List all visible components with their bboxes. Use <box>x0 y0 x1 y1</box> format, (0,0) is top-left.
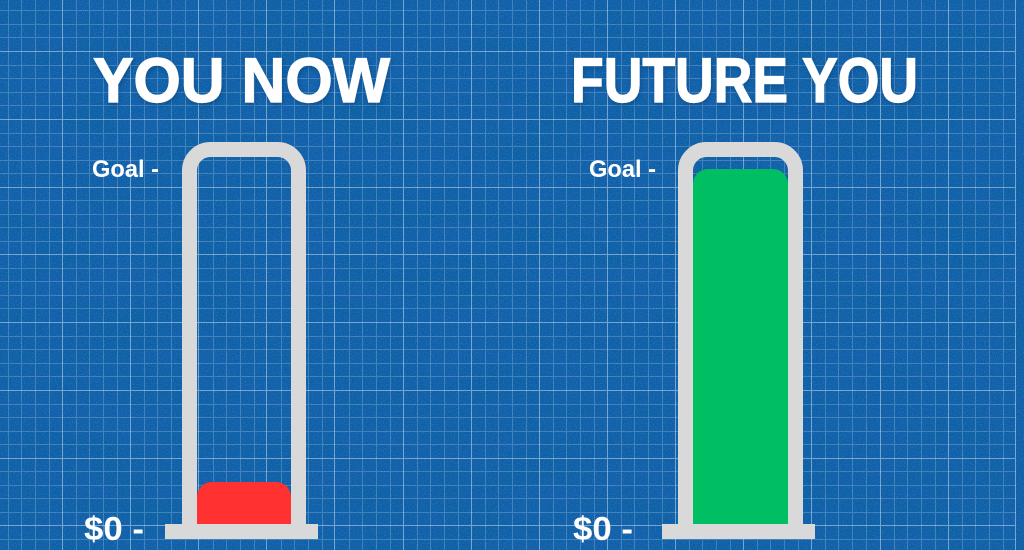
panel: you now gauge <box>84 150 318 547</box>
label: zero dollars: $0 - <box>84 510 144 547</box>
label: zero dollars: $0 - <box>573 510 633 547</box>
panel: future you gauge <box>573 150 815 547</box>
heading: future you: FUTURE YOU <box>571 46 918 116</box>
label: goal: Goal - <box>92 156 159 183</box>
gauge tube <box>686 150 796 530</box>
green fill level <box>693 169 788 524</box>
gauge base <box>662 524 815 539</box>
red fill level <box>197 482 291 524</box>
gauge base <box>165 524 318 539</box>
label: goal: Goal - <box>589 156 656 183</box>
heading: you now: YOU NOW <box>93 46 391 116</box>
gauge tube <box>190 150 298 530</box>
